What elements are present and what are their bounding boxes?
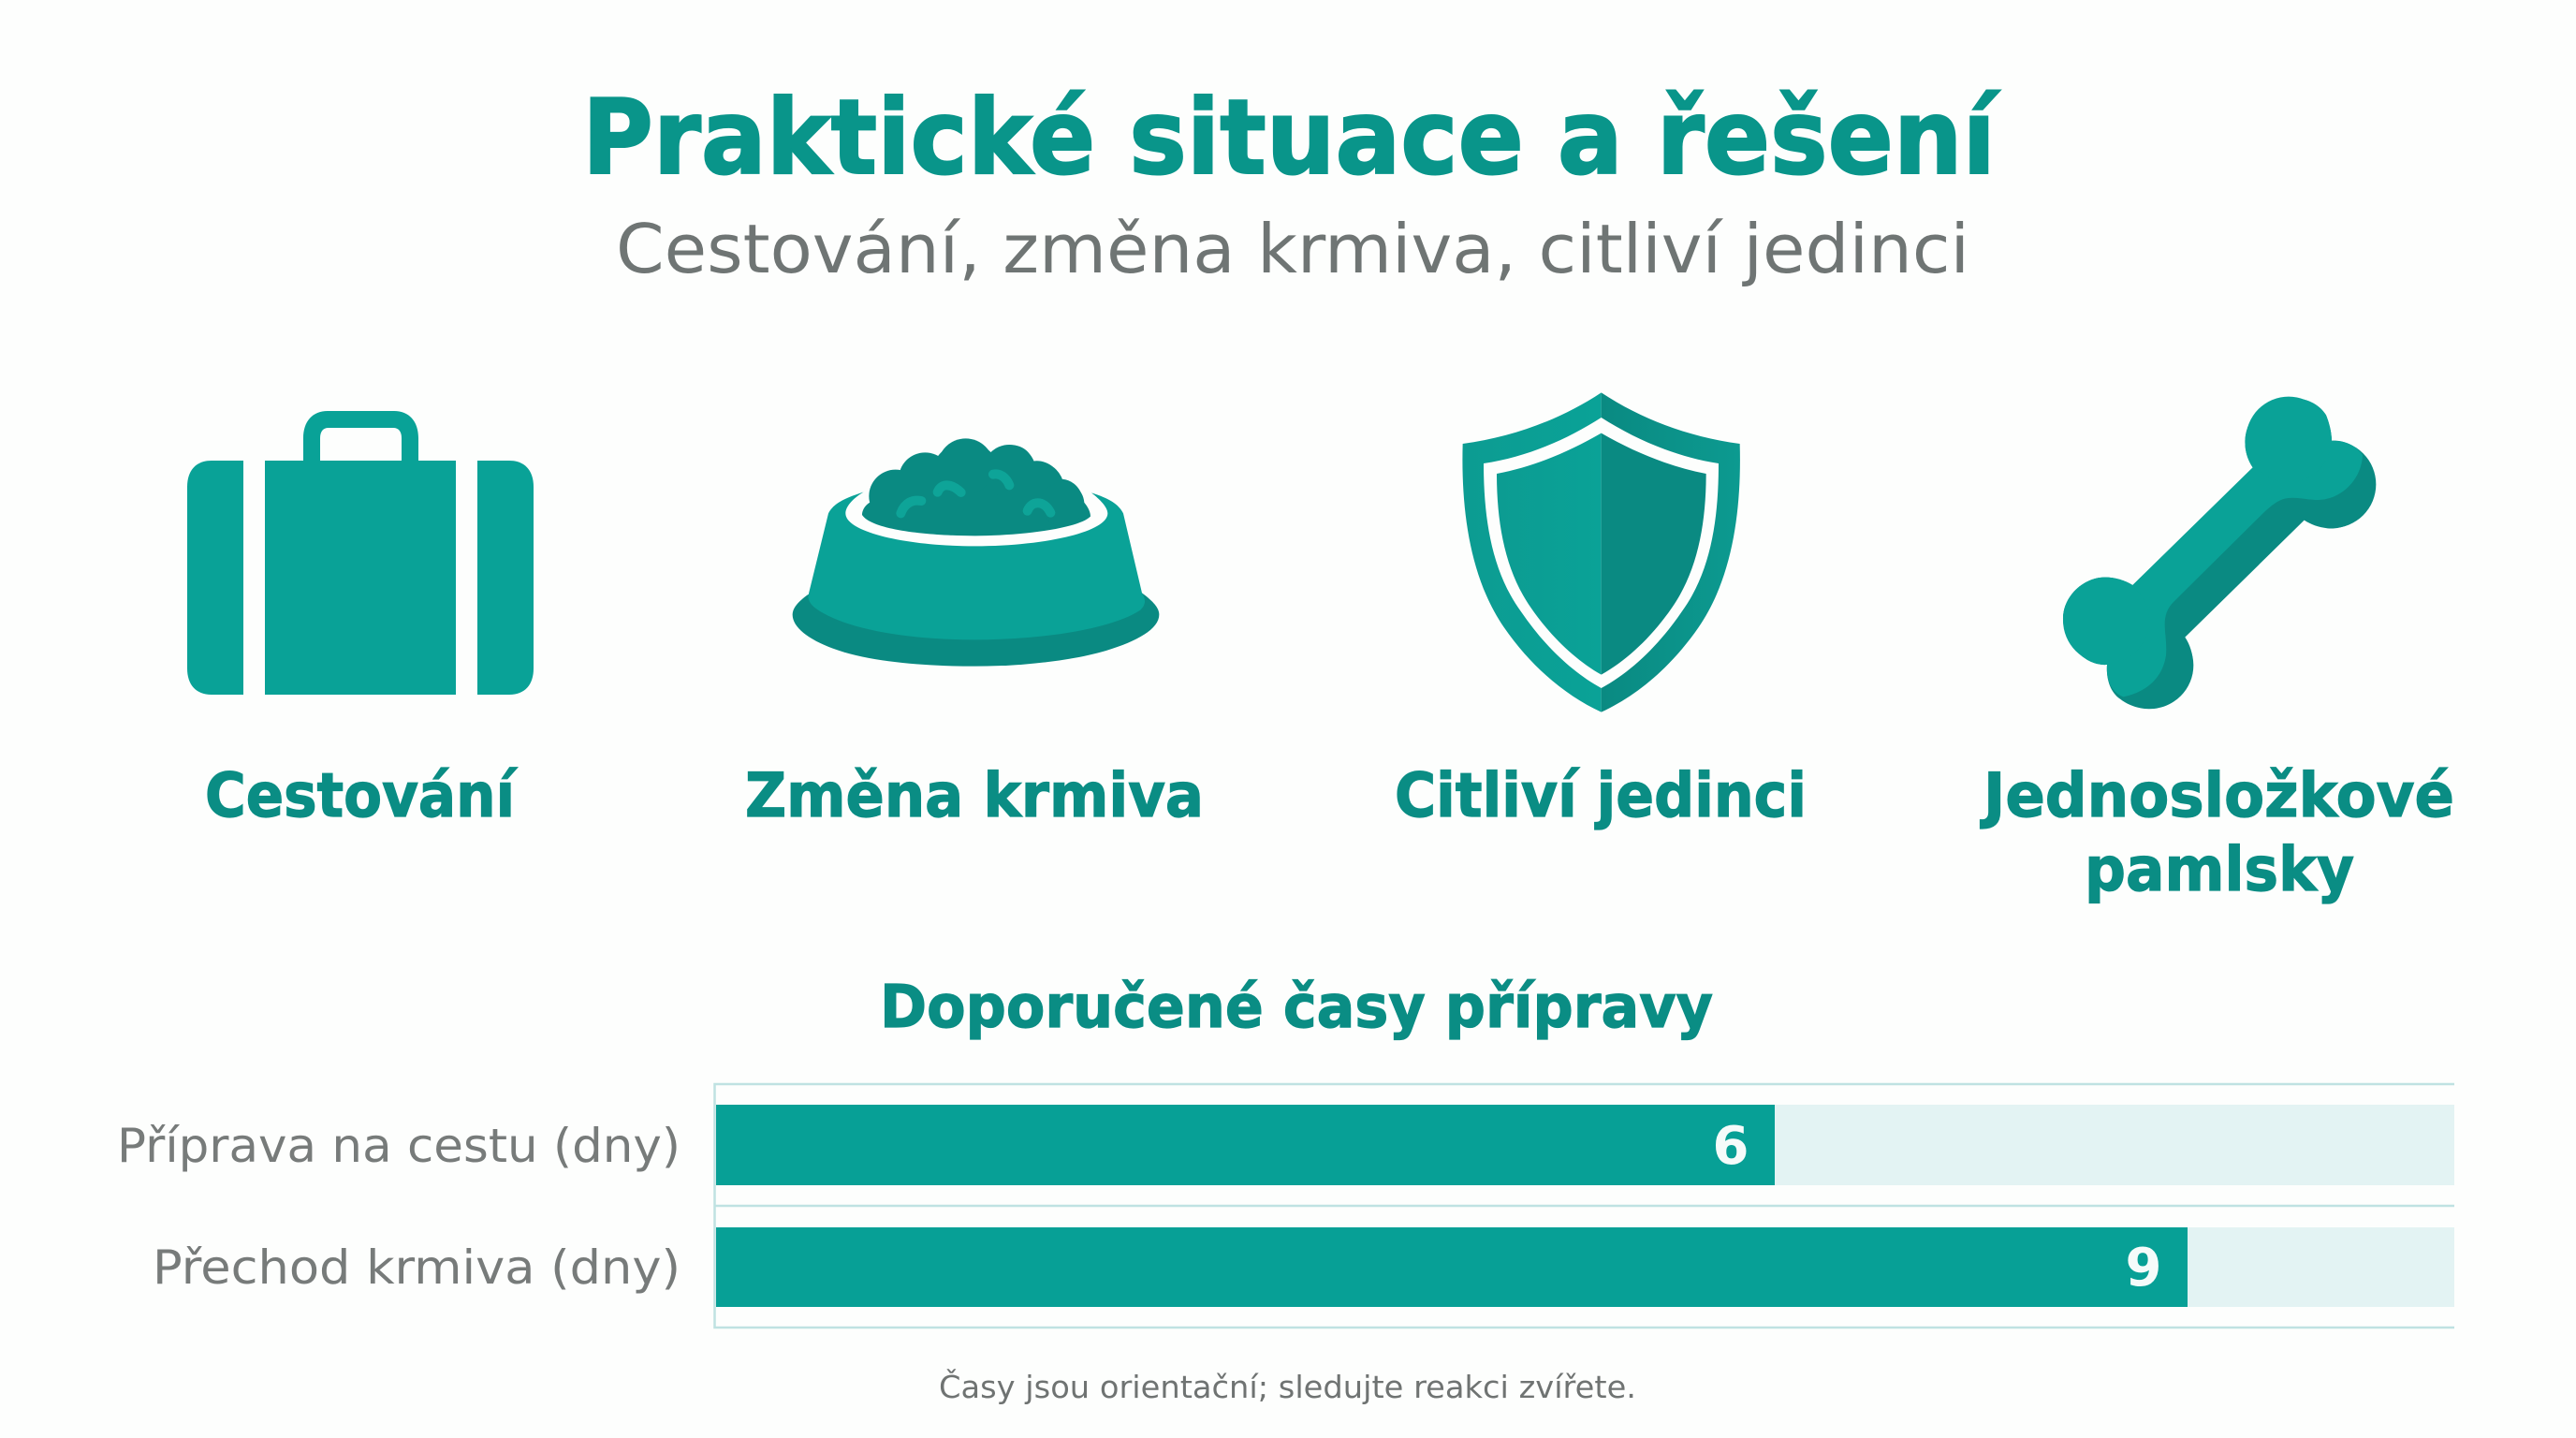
row: food transition: [153, 1227, 2454, 1307]
label: single-ingredient treats: Jednosložkové: [1980, 761, 2454, 831]
label: sensitive individuals: Citliví jedinci: [1395, 761, 1807, 831]
panel: single-ingredient treats: [1980, 397, 2454, 905]
icon: suitcase: [187, 411, 534, 695]
panel: sensitive individuals: [1395, 392, 1807, 831]
footnote: Časy jsou orientační; sledujte reakci zvířete.: [939, 1368, 1636, 1405]
panel: travel: [187, 411, 534, 831]
title: Praktické situace a řešení: [582, 78, 2000, 198]
label: single-ingredient treats: [1980, 761, 2454, 905]
panel: food change: [745, 438, 1204, 831]
subtitle: Cestování, změna krmiva, citliví jedinci: [616, 210, 1969, 288]
label: single-ingredient treats: pamlsky: [2085, 835, 2354, 905]
icon: shield: [1462, 392, 1740, 712]
row: food transition: 9: [2126, 1238, 2161, 1299]
row: travel preparation: 6: [1713, 1116, 1749, 1177]
bar chart: preparation times: [117, 1084, 2454, 1328]
label: travel: Cestování: [205, 761, 518, 831]
row: travel preparation: Příprava na cestu (dny): [117, 1119, 681, 1173]
row: food transition: Přechod krmiva (dny): [153, 1240, 681, 1295]
icon: bone: [2063, 397, 2376, 709]
icon: bowl with food: [793, 438, 1159, 667]
row: travel preparation: [117, 1105, 2454, 1185]
label: food change: Změna krmiva: [745, 761, 1204, 831]
chart heading: Doporučené časy přípravy: [880, 973, 1713, 1041]
